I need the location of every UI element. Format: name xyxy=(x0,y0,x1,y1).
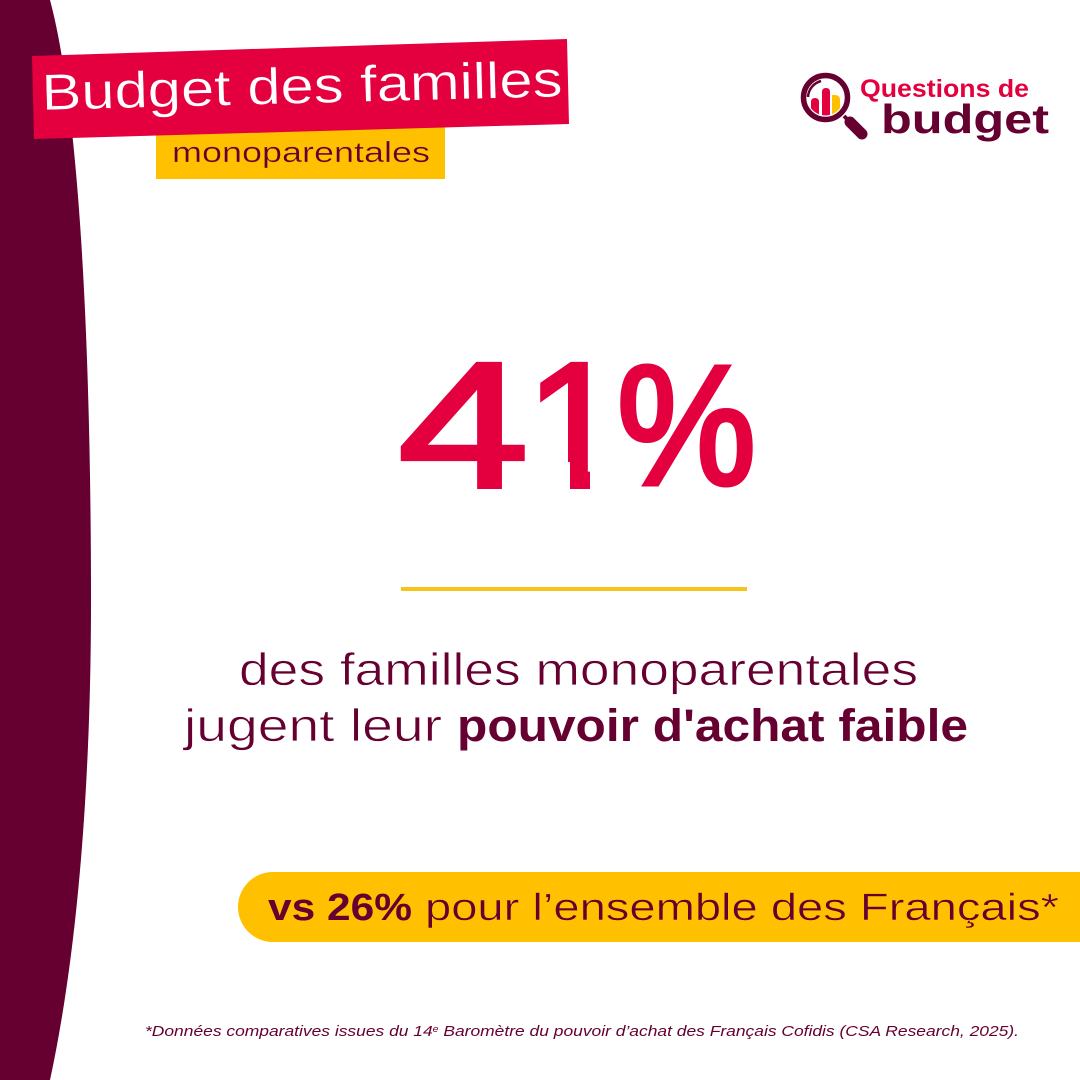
subtitle tag: monoparentales: monoparentales xyxy=(172,137,430,169)
title banner: Budget des familles xyxy=(41,50,563,121)
key figure: 41%: 4 xyxy=(398,325,529,525)
logo: Questions de budget: Questions de xyxy=(860,75,1029,103)
comparison pill: vs 26% xyxy=(268,887,412,929)
footnote: e xyxy=(433,1024,439,1034)
key figure: 41%: % xyxy=(617,331,756,521)
left curved band xyxy=(0,0,91,1080)
statement text: des familles monoparentales xyxy=(239,644,918,695)
statement text xyxy=(182,644,968,751)
statement text: pouvoir d'achat faible xyxy=(457,700,968,751)
icon: magnifying glass with bars xyxy=(804,76,862,134)
footnote: *Données comparatives issues du 14 xyxy=(145,1023,393,1040)
statement text: jugent leur xyxy=(182,700,442,751)
logo: Questions de budget xyxy=(804,75,1049,142)
yellow divider xyxy=(401,587,747,591)
title banner xyxy=(32,39,569,139)
subtitle tag: monoparentales xyxy=(156,120,445,179)
key figure: 41%: 1 xyxy=(525,325,625,525)
footnote: Baromètre du pouvoir d’achat des Français Cofidis (CSA Research, 2025). xyxy=(439,1023,1019,1040)
comparison pill: pour l’ensemble des Français* xyxy=(425,887,1059,929)
key figure: 41% xyxy=(400,362,753,489)
comparison pill xyxy=(238,872,1080,942)
logo: Questions de budget: budget xyxy=(881,96,1049,142)
